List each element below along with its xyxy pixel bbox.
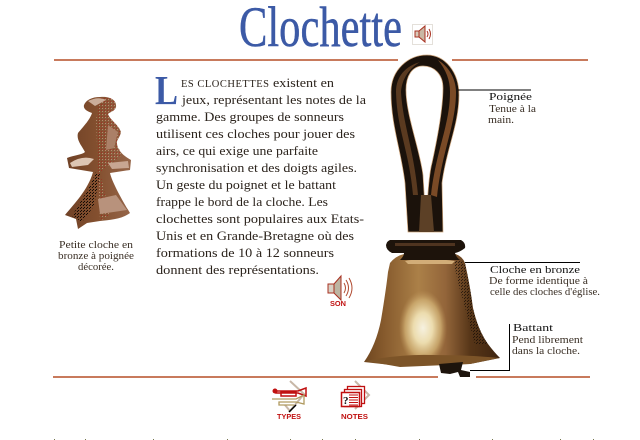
bottom edge specks — [54, 439, 594, 440]
body text: frappe le bord de la cloche. Les — [156, 194, 328, 209]
callout: battant — [470, 322, 583, 370]
icon: types trumpets: TYPES — [277, 412, 301, 421]
callout: cloche en bronze: De forme identique à — [489, 276, 589, 287]
icon: son speaker: SON — [330, 299, 346, 308]
bottom divider right — [476, 376, 590, 378]
body text: donnent des représentations. — [156, 262, 319, 277]
handle highlights — [396, 62, 420, 195]
small decorated bell illustration — [65, 97, 131, 229]
callout: poignée: Tenue à la — [489, 104, 537, 115]
body text: clochettes sont populaires aux Etats- — [156, 211, 364, 226]
caption: small bell: bronze à poignée — [58, 251, 135, 262]
icon: notes pages: NOTES — [341, 412, 368, 421]
bell body — [364, 253, 500, 366]
handle loop — [391, 55, 459, 232]
clapper — [439, 362, 470, 377]
body text: Unis et en Grande-Bretagne où des — [156, 228, 354, 243]
caption: small bell — [58, 240, 135, 273]
icon: notes pages — [341, 381, 369, 421]
body text: synchronisation et des doigts agiles. — [156, 160, 357, 175]
body text: jeux, représentant les notes de la — [181, 92, 366, 107]
callout: battant: Pend librement — [512, 335, 583, 346]
icon: title speaker button — [412, 24, 432, 44]
callout: cloche en bronze — [465, 262, 600, 298]
body text: formations de 10 à 12 sonneurs — [156, 245, 334, 260]
icon: son speaker — [328, 276, 352, 308]
bottom divider left — [53, 376, 438, 378]
callout: poignée — [458, 90, 537, 126]
body text: utilisent ces cloches pour jouer des — [156, 126, 355, 141]
caption: small bell: Petite cloche en — [59, 240, 133, 251]
callout: battant: dans la cloche. — [512, 346, 580, 357]
callout: cloche en bronze: celle des cloches d'église. — [490, 287, 600, 298]
large bell illustration — [364, 55, 500, 377]
top divider right — [452, 59, 588, 61]
icon: types trumpets — [272, 381, 306, 421]
callout: battant: Battant — [513, 322, 553, 334]
collar — [386, 240, 465, 260]
drop cap: L — [155, 67, 178, 113]
body text: airs, ce qui exige une parfaite — [156, 143, 318, 158]
body text: ES CLOCHETTES — [181, 79, 269, 90]
top divider left — [54, 59, 398, 61]
body text: existent en — [273, 75, 335, 90]
callout: poignée: main. — [488, 115, 514, 126]
caption: small bell: décorée. — [78, 262, 114, 273]
icon: notes pages: ? — [343, 395, 348, 407]
body text — [156, 75, 366, 277]
body text: gamme. Des groupes de sonneurs — [156, 109, 344, 124]
body text: Un geste du poignet et le battant — [156, 177, 336, 192]
callout: poignée: Poignée — [489, 91, 532, 103]
callout: cloche en bronze: Cloche en bronze — [490, 264, 580, 276]
